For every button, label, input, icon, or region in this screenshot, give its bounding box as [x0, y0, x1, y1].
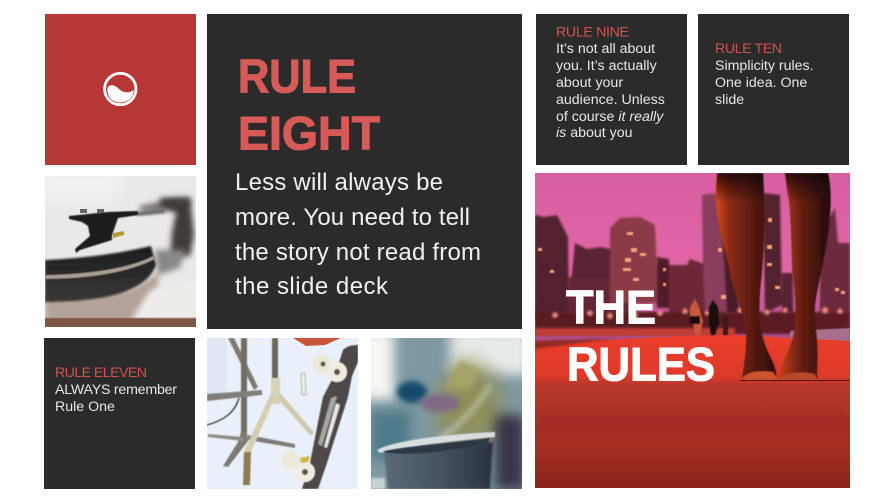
panel: red logo tile [45, 14, 196, 165]
text: rule eleven body [55, 382, 177, 415]
figures [690, 299, 728, 335]
text: rule eleven body: Rule One [55, 399, 115, 415]
title: the rules: RULES [567, 338, 715, 390]
heading: rule eight: EIGHT [238, 106, 380, 160]
photo: skateboard and stands [207, 338, 358, 489]
city lights [538, 218, 845, 299]
legs [716, 173, 831, 380]
ground [535, 335, 850, 488]
title: the rules [566, 290, 714, 382]
text: rule nine body: you. It’s actually [556, 58, 658, 74]
text: rule eleven body: ALWAYS remember [55, 382, 177, 398]
text: rule nine body [556, 41, 665, 141]
text: rule eleven heading: RULE ELEVEN [55, 365, 147, 381]
text: rule eight body: the story not read from [235, 239, 481, 266]
photo: steaming cup [371, 338, 522, 489]
tonearm headshell [69, 211, 139, 253]
title: the rules: THE [566, 280, 656, 334]
panel: rule ten [698, 14, 849, 165]
heading: rule eight [238, 50, 380, 160]
text: rule nine body: audience. Unless [556, 92, 665, 108]
text: rule ten body: Simplicity rules. [715, 58, 814, 74]
text: rule nine body: is about you [556, 125, 633, 141]
panel: rule nine [536, 14, 687, 165]
text: rule eight body: the slide deck [235, 273, 389, 300]
text: rule nine body: about your [556, 75, 623, 91]
text: rule eight body [235, 169, 481, 300]
text: rule eight body: more. You need to tell [235, 204, 470, 231]
text: rule ten heading: RULE TEN [715, 41, 782, 57]
skyline [535, 193, 850, 318]
text: rule nine body: of course it really [556, 109, 664, 125]
cup [384, 442, 493, 489]
panel: rule eight [207, 14, 522, 329]
promenade lights [535, 307, 850, 334]
heading: rule eight: RULE [238, 50, 356, 102]
photo: turntable [45, 176, 196, 327]
text: rule ten body: One idea. One [715, 75, 807, 91]
photo: the rules city and legs [535, 173, 850, 488]
text: rule eight body: Less will always be [235, 169, 443, 196]
platter [45, 246, 156, 302]
text: rule nine heading: RULE NINE [556, 24, 629, 40]
text: rule ten body [715, 58, 814, 108]
icon: yin-yang logo [105, 73, 136, 105]
text: rule nine body: It’s not all about [556, 41, 655, 57]
panel: rule eleven [44, 338, 195, 489]
text: rule ten body: slide [715, 92, 744, 108]
